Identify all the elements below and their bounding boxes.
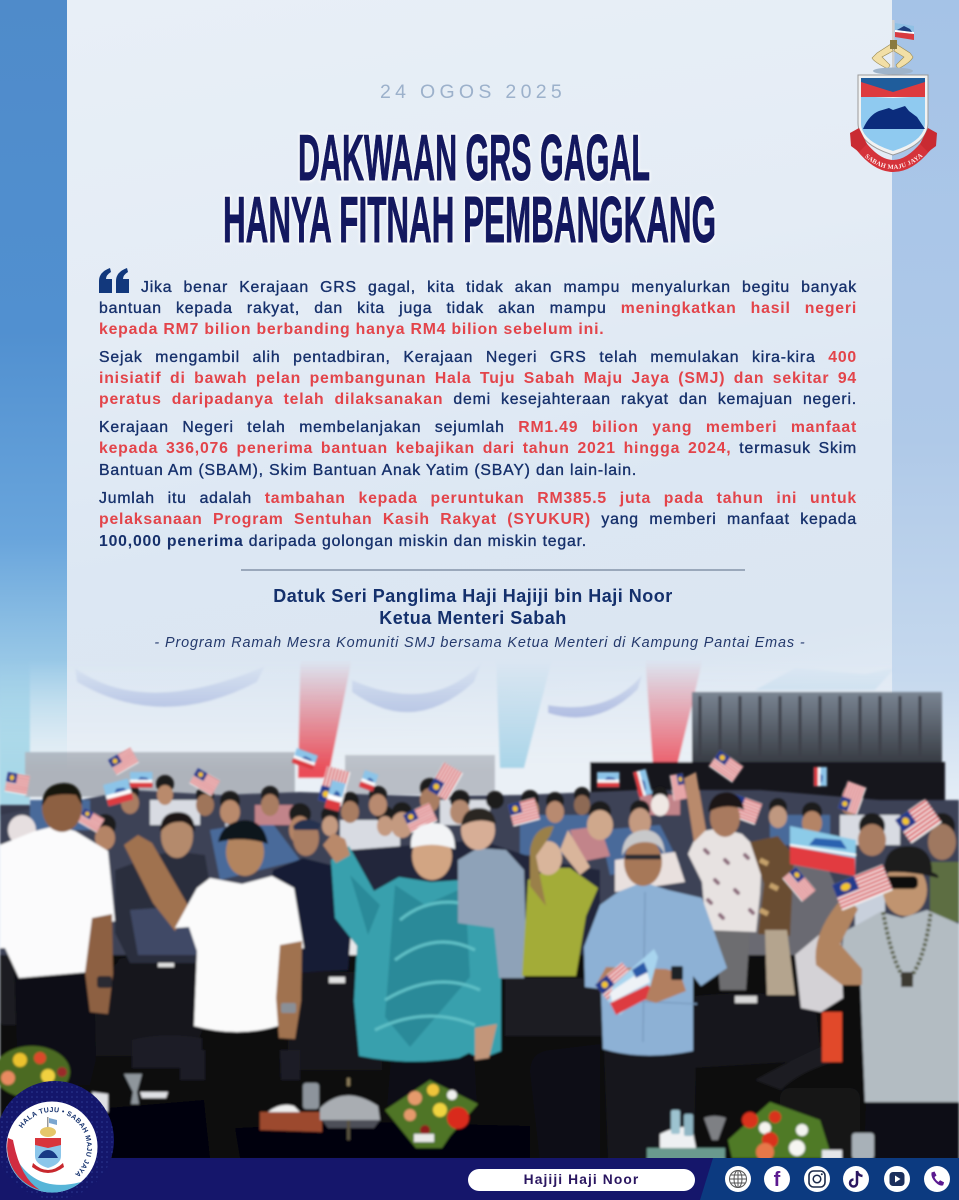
shield — [858, 75, 928, 155]
sofas and dark floor — [0, 935, 959, 1162]
tissue, bottles and glass: right — [647, 1110, 874, 1160]
paragraph 1: Jika benar Kerajaan GRS gagal, kita tidak akan mampu menyalurkan begitu banyak — [141, 279, 857, 296]
flag: Malaysia front — [783, 865, 893, 910]
ribbon with motto: SABAH MAJU JAYA — [865, 154, 923, 170]
attribution: Datuk Seri Panglima Haji Hajiji bin Haji Noor — [273, 586, 673, 606]
footer bar: navy — [0, 1158, 959, 1200]
person: white shirt with black cap — [124, 820, 304, 1135]
icon: facebook — [764, 1166, 790, 1192]
paragraph 4: Jumlah itu adalah tambahan kepada peruntukan RM385.5 juta pada tahun ini untuk — [99, 490, 857, 507]
arms holding pole — [872, 40, 913, 74]
icon: tiktok — [843, 1166, 869, 1192]
table: centre with chafing dish and tissue — [235, 1078, 530, 1158]
ribbon with motto — [850, 128, 937, 172]
background: right strip — [892, 0, 959, 800]
logo: Sabah coat of arms — [850, 20, 937, 172]
badge: Hala Tuju Sabah Maju Jaya: HALA TUJU • SABAH MAJU JAYA — [18, 1107, 92, 1176]
attribution — [154, 586, 806, 651]
person: teal batik shirt with white cap — [323, 823, 501, 1105]
paragraph 2 — [99, 349, 857, 408]
paragraph 3: Bantuan Am (SBAM), Skim Bantuan Anak Yatim (SBAY) dan lain-lain. — [99, 462, 637, 479]
title — [223, 121, 716, 255]
flowers: left — [0, 1046, 70, 1098]
date: 24 OGOS 2025 — [380, 81, 566, 103]
person: grey-blue shirt behind — [458, 808, 526, 978]
paragraph 1 — [99, 279, 857, 338]
table: left — [92, 1074, 210, 1158]
name pill — [468, 1169, 695, 1191]
paragraph 2: inisiatif di bawah pelan pembangunan Hala Tuju Sabah Maju Jaya (SMJ) dan sekitar 94 — [99, 370, 857, 387]
person: navy shirt behind centre-left — [271, 819, 353, 974]
paragraph 4: 100,000 penerima daripada golongan miskin dan miskin tegar. — [99, 533, 587, 550]
crowd flags — [5, 747, 942, 843]
paragraph 1: bantuan kepada rakyat, dan kita juga tidak akan mampu meningkatkan hasil negeri — [99, 300, 857, 317]
paragraph 4: pelaksanaan Program Sentuhan Kasih Rakyat (SYUKUR) yang memberi manfaat kepada — [99, 511, 857, 528]
paragraph 4 — [99, 490, 857, 550]
icon: facebook: f — [774, 1169, 781, 1191]
flowers: centre — [385, 1080, 478, 1148]
badge: Hala Tuju Sabah Maju Jaya — [0, 1081, 114, 1198]
attribution: - Program Ramah Mesra Komuniti SMJ bersama Ketua Menteri di Kampung Pantai Emas - — [154, 635, 806, 651]
person: woman in green behind — [522, 826, 598, 976]
social icons — [725, 1166, 950, 1192]
icon: video play — [884, 1166, 910, 1192]
footer bar: blue slanted section — [700, 1158, 959, 1200]
paragraph 1: kepada RM7 bilion berbanding hanya RM4 bilion sebelum ini. — [99, 321, 604, 338]
icon: quote mark — [99, 268, 129, 293]
paragraph 3 — [99, 419, 857, 479]
stage LED screen — [692, 692, 942, 764]
tent backdrop — [0, 666, 947, 819]
icon: globe — [725, 1166, 751, 1192]
photo: waving crowd with leaders — [0, 666, 959, 1200]
icon: phone — [924, 1166, 950, 1192]
person: floral shirt with raised arm — [684, 772, 762, 990]
background: central panel — [67, 0, 892, 830]
paragraph 3: Kerajaan Negeri telah membelanjakan sejumlah RM1.49 bilion yang memberi manfaat — [99, 419, 857, 436]
paragraph 2: Sejak mengambil alih pentadbiran, Kerajaan Negeri GRS telah memulakan kira-kira 400 — [99, 349, 857, 366]
person: light blue shirt holding flags — [584, 830, 727, 1158]
paragraph 3: kepada 336,076 penerima bantuan kebajikan dari tahun 2021 hingga 2024, termasuk Skim — [99, 440, 857, 457]
body text — [99, 279, 857, 550]
attribution: Ketua Menteri Sabah — [379, 608, 567, 628]
flowers: right — [728, 1102, 832, 1161]
name pill: Hajiji Haji Noor — [524, 1172, 639, 1187]
flag on pole — [892, 20, 914, 70]
person: grey shirt with black hat and necklace — [815, 846, 959, 1158]
paragraph 2: peratus daripadanya telah dilaksanakan demi kesejahteraan rakyat dan kemajuan negeri. — [99, 391, 857, 408]
icon: instagram — [804, 1166, 830, 1192]
crowd — [0, 775, 959, 1000]
background: left strip — [0, 0, 67, 830]
person: far left in white shirt — [0, 783, 115, 1085]
person: camouflage shirt — [750, 836, 795, 995]
flag: Sabah large — [790, 826, 856, 876]
flag: held by man in blue shirt — [595, 949, 658, 1015]
person: dark shirt behind left — [115, 812, 215, 963]
